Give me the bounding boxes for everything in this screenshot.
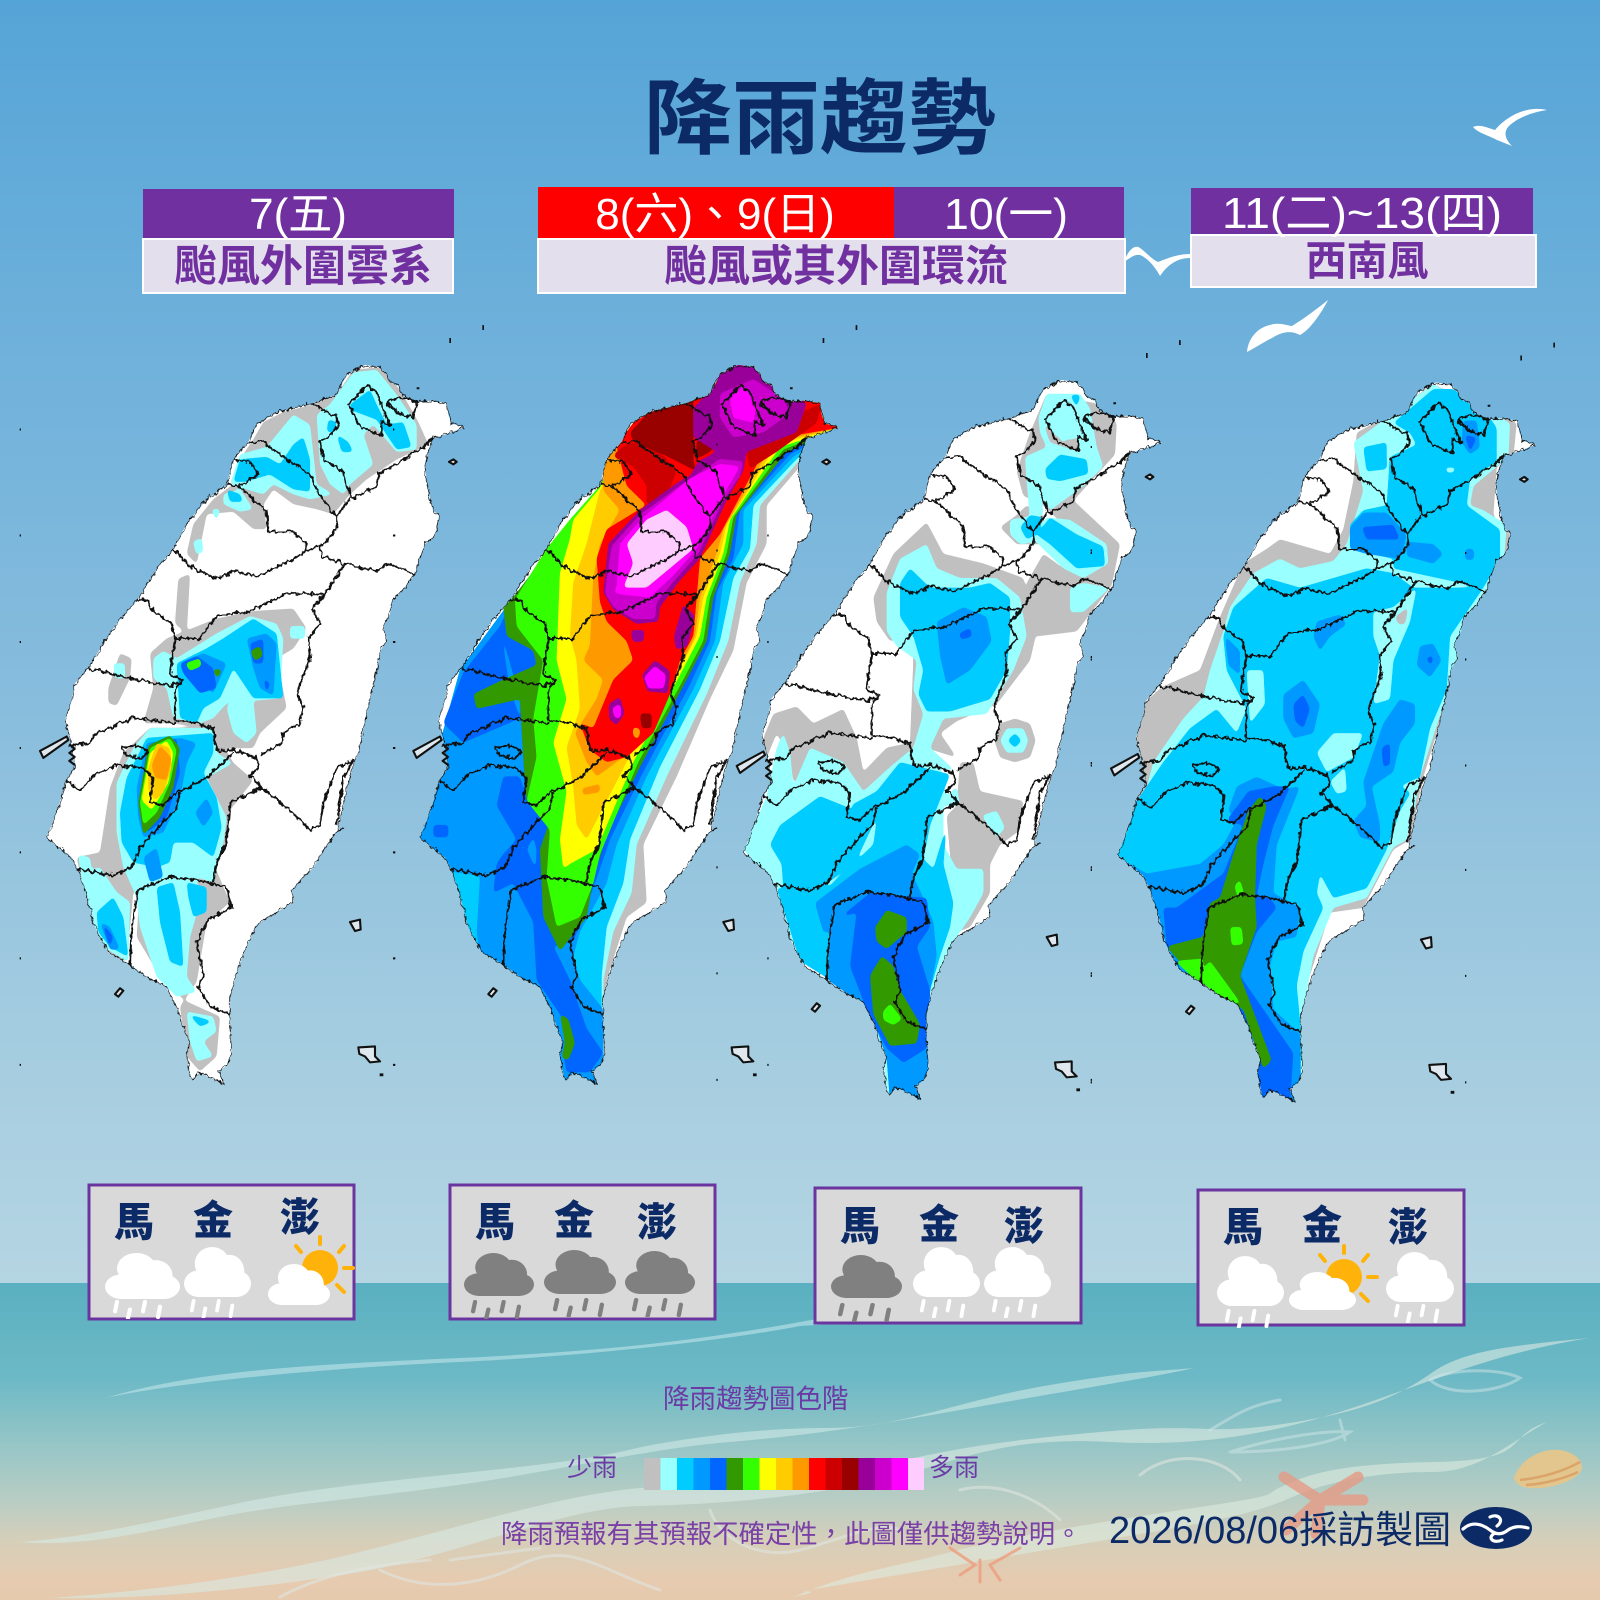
header: 11(二)~13(四): 11(二)~13(四) xyxy=(1222,189,1502,238)
map 4: 11(二)~13(四) rainfall xyxy=(1091,343,1555,1106)
outlying islands panel 3: 金 xyxy=(919,1203,959,1247)
map 3: 10(一) rainfall xyxy=(716,340,1181,1102)
coral xyxy=(950,1548,1020,1582)
shell xyxy=(1514,1450,1582,1488)
legend colour scale xyxy=(644,1458,924,1490)
outlying islands panel 2: 金 xyxy=(554,1199,594,1243)
outlying islands panel 3: 澎 xyxy=(1004,1205,1044,1249)
header: 8(六)、9(日) 10(一) xyxy=(538,187,1125,293)
legend low label: 少雨 xyxy=(567,1454,617,1482)
bird upper right xyxy=(1473,109,1547,146)
outlying islands panel 1: 馬 xyxy=(114,1201,154,1245)
bird lower xyxy=(1247,300,1328,352)
legend high label: 多雨 xyxy=(929,1454,979,1482)
outlying islands panel 2 xyxy=(450,1185,715,1319)
title: 降雨趨勢 xyxy=(644,74,996,165)
outlying islands panel 1: 金 xyxy=(193,1199,233,1243)
bird between headers xyxy=(1124,247,1190,276)
header: 7(五): 颱風外圍雲系 xyxy=(174,243,432,291)
logo: CWA xyxy=(1460,1507,1532,1549)
starfish xyxy=(1284,1477,1363,1534)
date and maker: 2026/08/06採訪製圖 xyxy=(1109,1510,1451,1552)
outlying islands panel 4: 金 xyxy=(1302,1204,1342,1248)
outlying islands panel 4 xyxy=(1198,1190,1464,1327)
outlying islands panel 4: 馬 xyxy=(1223,1206,1263,1250)
outlying islands panel 2: 澎 xyxy=(637,1201,677,1245)
outlying islands panel 3: 馬 xyxy=(840,1205,880,1249)
map 2: 8(六)、9(日) rainfall xyxy=(393,325,857,1092)
disclaimer note: 降雨預報有其預報不確定性，此圖僅供趨勢說明。 xyxy=(501,1519,1082,1549)
outlying islands panel 1 xyxy=(89,1185,354,1319)
outlying islands panel 3 xyxy=(815,1188,1081,1323)
outlying islands panel 1: 澎 xyxy=(280,1196,320,1240)
outlying islands panel 2: 馬 xyxy=(475,1201,515,1245)
header: 8(六)、9(日) 10(一): 颱風或其外圍環流 xyxy=(664,243,1008,291)
header: 11(二)~13(四) xyxy=(1191,188,1536,287)
map 1: 7(五) rainfall xyxy=(20,325,484,1085)
header: 8(六)、9(日) 10(一): 10(一) xyxy=(944,190,1068,239)
outlying islands panel 4: 澎 xyxy=(1388,1206,1428,1250)
header: 11(二)~13(四): 西南風 xyxy=(1306,238,1428,284)
header: 7(五): 7(五) xyxy=(249,190,347,239)
header: 7(五) xyxy=(143,189,454,293)
legend title: 降雨趨勢圖色階 xyxy=(663,1384,848,1414)
header: 8(六)、9(日) 10(一): 8(六)、9(日) xyxy=(595,190,835,239)
